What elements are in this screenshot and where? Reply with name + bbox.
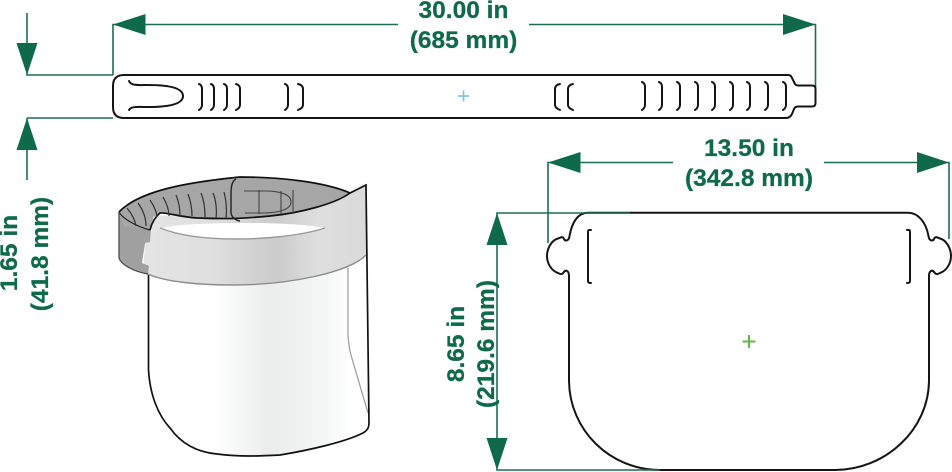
- visor left bracket: [588, 230, 591, 283]
- visor height dimension: [443, 213, 660, 470]
- arrow: visor width right: [917, 152, 949, 173]
- arrow: visor height bottom: [486, 438, 508, 470]
- assembled face shield: [119, 177, 369, 456]
- band slots: [127, 192, 226, 226]
- lens inner edge: [348, 268, 368, 413]
- lens opening: [160, 223, 324, 239]
- band inner surface: [119, 177, 350, 230]
- band top outline: [119, 177, 369, 423]
- icon: strap centre mark: [458, 90, 469, 102]
- arrow: visor height top: [486, 213, 508, 245]
- label: strap height metric: (41.8 mm): [27, 197, 54, 311]
- icon: visor centre mark: [742, 335, 756, 348]
- band outer tail: [119, 212, 151, 274]
- strap width dimension: [113, 0, 816, 88]
- arrow: strap height bottom: [16, 118, 38, 150]
- label: visor height: 8.65 in: [443, 306, 470, 382]
- visor flat pattern: [547, 213, 951, 470]
- strap left slots: [199, 84, 303, 110]
- label: visor height metric: (219.6 mm): [473, 280, 500, 408]
- arrow: strap height top: [16, 43, 38, 75]
- band lower edge: [148, 255, 366, 285]
- headband strap: [113, 75, 816, 118]
- strap centre slots: [555, 84, 573, 110]
- label: visor width: (342.8 mm): [685, 165, 813, 192]
- strap overlap tab: [231, 179, 240, 221]
- strap height dimension: [0, 13, 113, 291]
- label: strap width: (685 mm): [410, 27, 517, 54]
- strap loop cutout: [129, 81, 183, 110]
- lens: [148, 255, 369, 456]
- label: visor width: 13.50 in: [704, 135, 794, 162]
- arrow: visor width left: [548, 152, 580, 173]
- band front: [143, 185, 366, 285]
- strap right slots: [642, 82, 786, 110]
- arrow: strap width left: [113, 14, 146, 35]
- visor right bracket: [907, 230, 910, 283]
- arrow: strap width right: [783, 14, 816, 35]
- visor width dimension: [548, 135, 949, 243]
